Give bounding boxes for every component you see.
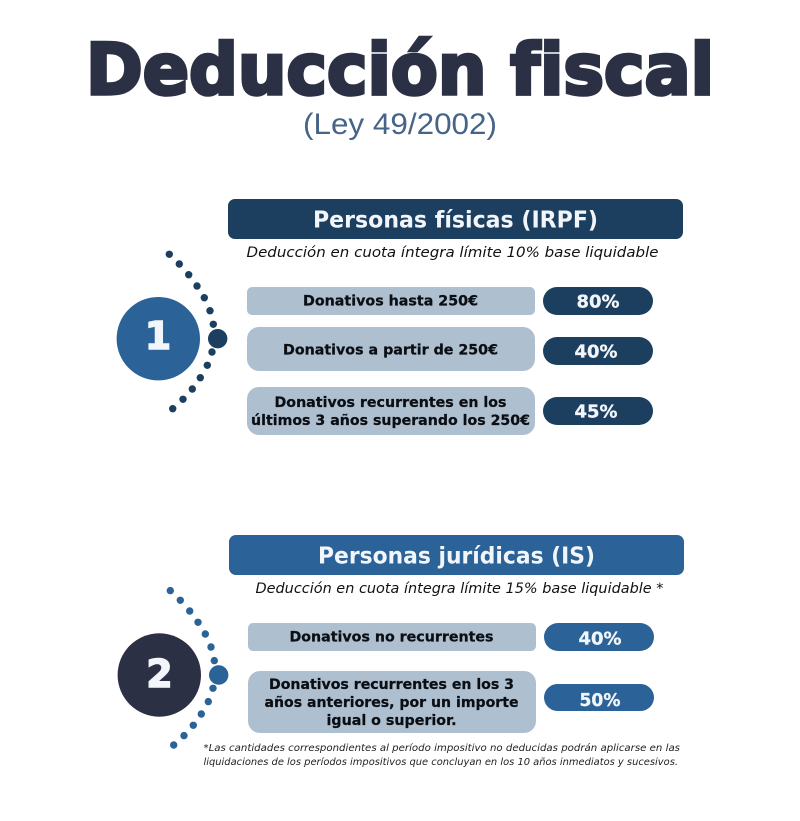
panel: personas jurídicas (118, 535, 684, 768)
row: donativos recurrentes 3 años (248, 671, 536, 733)
subtitle: (Ley 49/2002) (303, 108, 497, 141)
number circle 1: 1 (145, 314, 171, 358)
row: donativos recurrentes 3 años: años anteriores, por un importe (264, 695, 518, 711)
pill: 40%: 40% (578, 628, 622, 650)
number circle 2 (118, 633, 201, 717)
pill: 50%: 50% (580, 690, 620, 711)
pill: 40% (543, 337, 653, 365)
footnote: liquidaciones de los períodos impositivos que concluyan en los 10 años inmediatos y sucesivos. (204, 757, 678, 768)
row: donativos no recurrentes (248, 623, 536, 651)
heading: personas jurídicas: Personas jurídicas (IS) (318, 544, 595, 570)
number circle 2: 2 (146, 652, 173, 696)
pill: 45% (543, 397, 653, 425)
title: Deducción fiscal (86, 29, 714, 111)
pill: 50% (544, 684, 654, 711)
heading: personas jurídicas (229, 535, 684, 575)
row: donativos hasta 250: Donativos hasta 250€ (303, 294, 478, 310)
pill: 80% (543, 287, 653, 315)
dotted arc 2 (167, 587, 228, 749)
pill: 45%: 45% (574, 402, 618, 422)
number circle 1 (117, 297, 200, 380)
row: donativos recurrentes: Donativos recurrentes en los (274, 395, 506, 411)
row: donativos recurrentes 3 años: Donativos recurrentes en los 3 (269, 677, 514, 693)
pill: 80%: 80% (576, 292, 620, 312)
row: donativos recurrentes 3 años: igual o superior. (326, 713, 456, 729)
footnote: *Las cantidades correspondientes al período impositivo no deducidas podrán aplicarse en las (204, 743, 680, 754)
dotted arc 1 (166, 251, 227, 412)
row: donativos hasta 250 (247, 287, 535, 315)
footnote (204, 743, 680, 768)
row: donativos recurrentes: últimos 3 años superando los 250€ (251, 413, 530, 429)
pill: 40%: 40% (574, 342, 618, 362)
panel: personas físicas (117, 199, 683, 435)
subheading: límite 10%: Deducción en cuota íntegra límite 10% base liquidable (246, 245, 658, 261)
row: donativos recurrentes (247, 387, 535, 435)
heading: personas físicas (228, 199, 683, 239)
heading: personas físicas: Personas físicas (IRPF) (313, 208, 598, 234)
row: donativos no recurrentes: Donativos no recurrentes (290, 630, 494, 646)
subheading: límite 15%: Deducción en cuota íntegra límite 15% base liquidable * (256, 581, 664, 597)
row: donativos a partir de 250 (247, 327, 535, 371)
pill: 40% (544, 623, 654, 651)
row: donativos a partir de 250: Donativos a partir de 250€ (283, 342, 498, 358)
